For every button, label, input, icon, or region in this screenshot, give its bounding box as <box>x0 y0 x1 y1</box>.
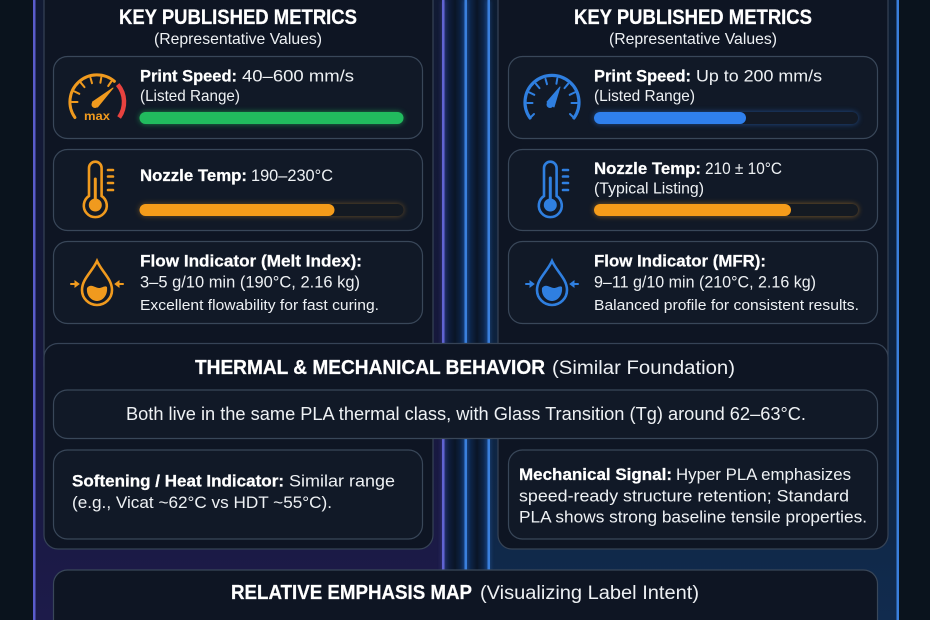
text: left print speed: 40–600 mm/s <box>242 68 354 86</box>
text: right flow indicator: Balanced profile for consistent results. <box>594 297 859 314</box>
text: right nozzle temp: 210 ± 10°C <box>705 160 782 178</box>
row: right flow indicator <box>508 242 878 324</box>
heading: thermal and mechanical behavior: (Similar Foundation) <box>552 358 735 379</box>
text: left flow indicator: Flow Indicator (Melt Index): <box>140 252 362 270</box>
heading: relative emphasis map: RELATIVE EMPHASIS MAP <box>231 582 472 604</box>
text: right nozzle temp: Nozzle Temp: <box>594 160 701 178</box>
bar: right print speed <box>594 112 858 124</box>
icon: blue drop <box>526 261 578 305</box>
text: left nozzle temp <box>140 167 333 185</box>
subheading: left representative values: (Representative Values) <box>154 31 322 48</box>
text: left print speed: (Listed Range) <box>140 88 240 105</box>
text: left nozzle temp: 190–230°C <box>251 167 333 185</box>
panel: thermal and mechanical behavior <box>44 344 888 549</box>
icon: blue thermometer <box>539 162 568 217</box>
bar: left nozzle temp <box>140 204 404 216</box>
callout: shared thermal class: Both live in the same PLA thermal class, with Glass Transition (Tg) around 62–63°C. <box>126 404 806 424</box>
row: left nozzle temp <box>54 150 422 230</box>
row: right print speed <box>508 56 878 138</box>
text: right nozzle temp: (Typical Listing) <box>594 180 704 198</box>
callout: shared thermal class <box>54 390 878 438</box>
card: softening and heat indicator: Softening / Heat Indicator: <box>72 472 284 490</box>
icon: blue gauge <box>525 75 579 118</box>
text: right flow indicator: Flow Indicator (MFR): <box>594 252 766 270</box>
card: mechanical signal: Hyper PLA emphasizes <box>676 466 851 484</box>
card: softening and heat indicator <box>54 450 422 539</box>
row: left flow indicator <box>54 242 422 324</box>
panel: right key published metrics <box>498 0 888 380</box>
text: left print speed: Print Speed: <box>140 68 237 86</box>
text: right nozzle temp <box>594 160 782 198</box>
text: left flow indicator: 3–5 g/10 min (190°C, 2.16 kg) <box>140 272 360 292</box>
text: right flow indicator <box>594 252 859 314</box>
bar: right nozzle temp <box>594 204 858 216</box>
subheading: right representative values: (Representative Values) <box>609 31 777 48</box>
heading: relative emphasis map <box>231 582 699 604</box>
text: left print speed <box>140 68 354 105</box>
heading: thermal and mechanical behavior: THERMAL & MECHANICAL BEHAVIOR <box>195 357 546 379</box>
card: mechanical signal: speed-ready structure retention; Standard <box>519 488 849 506</box>
bar: left print speed full <box>140 112 404 124</box>
text: left nozzle temp: Nozzle Temp: <box>140 167 247 185</box>
icon: orange drop <box>71 261 123 305</box>
heading: relative emphasis map: (Visualizing Label Intent) <box>480 583 699 604</box>
card: softening and heat indicator: (e.g., Vicat ~62°C vs HDT ~55°C). <box>72 493 332 512</box>
icon: orange gauge: max <box>84 109 110 123</box>
heading: left key published metrics: KEY PUBLISHED METRICS <box>119 6 357 29</box>
card: mechanical signal <box>508 450 878 539</box>
card: softening and heat indicator: Similar range <box>289 472 395 490</box>
card: mechanical signal: PLA shows strong baseline tensile properties. <box>519 508 867 526</box>
row: left print speed <box>54 56 422 138</box>
icon: orange gauge <box>70 75 124 123</box>
text: right print speed: Up to 200 mm/s <box>696 68 822 86</box>
panel: relative emphasis map <box>54 570 878 620</box>
text: right print speed: (Listed Range) <box>594 88 695 105</box>
text: right print speed: Print Speed: <box>594 68 691 86</box>
row: right nozzle temp <box>508 150 878 230</box>
icon: orange thermometer <box>84 162 113 217</box>
heading: right key published metrics: KEY PUBLISHED METRICS <box>574 6 812 29</box>
text: right flow indicator: 9–11 g/10 min (210°C, 2.16 kg) <box>594 272 816 292</box>
heading: thermal and mechanical behavior <box>195 357 735 379</box>
text: left flow indicator: Excellent flowability for fast curing. <box>140 297 379 314</box>
text: right print speed <box>594 68 822 105</box>
card: mechanical signal: Mechanical Signal: <box>519 466 672 484</box>
text: left flow indicator <box>140 252 379 314</box>
panel: left key published metrics <box>44 0 433 380</box>
